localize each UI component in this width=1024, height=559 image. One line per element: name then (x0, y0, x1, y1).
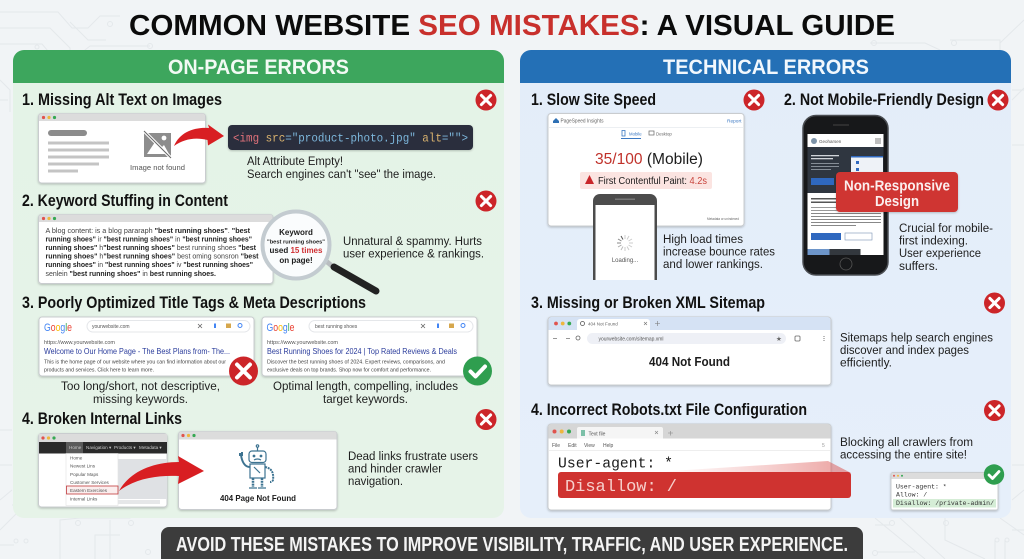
item 1 heading: 1. Slow Site Speed (531, 91, 656, 109)
icon: red x (476, 409, 496, 430)
note: blocking all crawlers: accessing the entire site! (840, 448, 967, 462)
bad search result card: This is the home page of our website where you can find information about our (44, 360, 226, 366)
browser with dropdown nav: Eastern Exercises (70, 488, 108, 493)
note: dead links: and hinder crawler (348, 462, 442, 476)
browser mockup with stuffed text: A blog content: is a blog pararaph "best running shoes". "best (46, 226, 250, 235)
note: mobile-first indexing: suffers. (899, 259, 938, 273)
pagespeed report card: PageSpeed Insights (560, 118, 604, 124)
item 1: missing alt text (22, 90, 496, 183)
bad search result card (39, 317, 254, 376)
good search result card: Discover the best running shoes of 2024. Expert reviews, comparisons, and (267, 360, 445, 366)
caption: good result: Optimal length, compelling, includes (273, 379, 458, 393)
text editor window: Help (603, 443, 614, 449)
code snippet (228, 125, 473, 150)
note: high load times: increase bounce rates (663, 244, 775, 258)
correct robots.txt card: User-agent: * (896, 484, 947, 490)
browser mockup with stuffed text: senlein "best running shoes" in best running shoes. (46, 269, 216, 278)
note: dead links: Dead links frustrate users (348, 449, 478, 463)
browser with dropdown nav: Popular Maps (70, 472, 99, 477)
magnifying glass callout: used 15 times (270, 246, 323, 255)
text editor window: User-agent: * (558, 456, 673, 472)
note: mobile-first indexing (899, 221, 993, 273)
note: unnatural and spammy: Unnatural & spammy. Hurts (343, 234, 482, 248)
browser mockup with stuffed text: running shoes" ir "best running shoes" in "best running shoes" (46, 234, 252, 244)
good search result card: Google (266, 322, 294, 334)
note: blocking all crawlers (840, 435, 973, 462)
bottom banner: AVOID THESE MISTAKES TO IMPROVE VISIBILITY, TRAFFIC, AND USER EXPERIENCE. (176, 534, 848, 556)
correct robots.txt card (891, 472, 998, 510)
browser with 404 page (178, 432, 337, 510)
item 3: missing xml sitemap (531, 292, 1005, 385)
browser mockup with stuffed text: running shoes" in "best running shoes" iv "best running shoes" (46, 260, 253, 269)
browser with dropdown nav: Newest Lins (70, 464, 96, 468)
phone mockup: Geoharsen (819, 139, 842, 144)
browser with dropdown nav: Products ▾ (114, 445, 136, 450)
note: unnatural and spammy: user experience & rankings. (343, 246, 484, 260)
good search result card (262, 317, 477, 376)
pagespeed report card: First Contentful Paint: 4.2s (598, 176, 707, 187)
icon: red x (476, 190, 496, 212)
note: dead links (348, 449, 478, 488)
text editor window: View (584, 443, 595, 449)
browser with dropdown nav: Internal Links (70, 496, 98, 502)
browser with dropdown nav: Customer Services (70, 480, 110, 485)
item 4 heading: 4. Incorrect Robots.txt File Configuration (531, 401, 807, 419)
browser with 404 sitemap: yourwebsite.com/sitemap.xml (598, 336, 664, 342)
item 2: not mobile friendly (784, 90, 1008, 275)
bad search result card: yourwebsite.com (92, 324, 130, 330)
item 4 heading: 4. Broken Internal Links (22, 410, 182, 428)
note: mobile-first indexing: User experience (899, 246, 981, 260)
note: dead links: navigation. (348, 474, 403, 488)
browser with dropdown nav: Navigation ▾ (86, 445, 112, 450)
browser mockup with broken image: Image not found (130, 163, 185, 172)
panel: technical errors (520, 50, 1011, 518)
heading: on-page errors: ON-PAGE ERRORS (168, 56, 349, 79)
pagespeed report card: Report (727, 118, 742, 124)
heading: technical errors: TECHNICAL ERRORS (663, 56, 869, 79)
browser with 404 sitemap: ★ (776, 335, 782, 343)
code snippet: <img src="product-photo.jpg" alt=""> (233, 132, 468, 146)
browser mockup with broken image (38, 114, 206, 183)
arrow between pages (119, 456, 204, 491)
caption: bad result: missing keywords. (93, 392, 188, 406)
pagespeed report card: Desktop (656, 132, 672, 136)
caption: bad result (61, 379, 220, 406)
note: mobile-first indexing: first indexing. (899, 234, 968, 248)
browser mockup with stuffed text: running shoes" h"best running shoes" best running shoes "best (46, 243, 256, 252)
disallow highlight (558, 461, 851, 498)
note: unnatural and spammy (343, 234, 484, 260)
icon: red x (744, 90, 764, 110)
text editor window: Edit (568, 443, 577, 449)
good search result card: Best Running Shoes for 2024 | Top Rated Reviews & Deals (267, 346, 457, 356)
item 4: broken internal links (22, 409, 496, 510)
caption: good result (273, 379, 458, 406)
correct robots.txt card: Disallow: /private-admin/ (896, 500, 994, 507)
item 4: robots.txt (531, 400, 1005, 510)
icon: green check (984, 464, 1004, 485)
browser with dropdown nav: Metadata ▾ (139, 445, 162, 450)
item 1: slow site speed (531, 90, 775, 280)
bad search result card: Google (44, 322, 72, 334)
browser with 404 sitemap: 404 Not Found (588, 322, 618, 326)
callout: non-responsive design: Non-Responsive (844, 178, 950, 194)
phone mockup (803, 116, 888, 275)
item 3: title tags and meta descriptions (22, 294, 492, 406)
icon: large red x (229, 356, 258, 386)
good search result card: best running shoes (315, 324, 358, 330)
item 2: keyword stuffing (22, 190, 496, 291)
note: sitemaps help: discover and index pages (840, 343, 969, 357)
good search result card: https://www.yourwebsite.com (267, 340, 338, 346)
icon: robot (240, 445, 273, 488)
note: alt attribute empty: Search engines can't "see" the image. (247, 167, 436, 181)
magnifying glass callout: on page! (279, 256, 313, 265)
text editor window: Text file (588, 432, 606, 438)
text editor window: 5 (822, 443, 825, 449)
panel: on-page errors (13, 50, 504, 518)
item 2 heading: 2. Keyword Stuffing in Content (22, 192, 228, 210)
callout: non-responsive design: Design (875, 194, 919, 210)
browser with 404 page: 404 Page Not Found (220, 493, 296, 503)
text editor window (548, 424, 831, 510)
magnifying glass callout (262, 212, 376, 291)
bad search result card: Welcome to Our Home Page - The Best Plans from- The... (44, 346, 230, 356)
title: COMMON WEBSITE SEO MISTAKES : A VISUAL GUIDE (129, 10, 895, 42)
bad search result card: products and services. Click here to learn more. (44, 368, 154, 374)
item 3 heading: 3. Missing or Broken XML Sitemap (531, 294, 765, 312)
callout: non-responsive design (836, 172, 958, 212)
note: high load times: and lower rankings. (663, 257, 763, 271)
browser mockup with stuffed text (38, 214, 273, 284)
note: sitemaps help (840, 330, 993, 370)
item 2 heading: 2. Not Mobile-Friendly Design (784, 91, 984, 109)
caption: good result: target keywords. (323, 392, 408, 406)
browser with dropdown nav: Home (69, 445, 82, 450)
note: alt attribute empty: Alt Attribute Empty! (247, 154, 343, 168)
good search result card: exclusive deals on top brands. Shop now for comfort and performance. (267, 368, 431, 374)
pagespeed report card: Mobile (629, 132, 642, 136)
note: mobile-first indexing: Crucial for mobile- (899, 221, 993, 235)
note: alt attribute empty (247, 154, 436, 181)
note: sitemaps help: efficiently. (840, 356, 892, 370)
pagespeed report card: 35/100 (Mobile) (595, 151, 703, 168)
magnifying glass callout: "best running shoes" (267, 240, 325, 246)
note: blocking all crawlers: Blocking all crawlers from (840, 435, 973, 449)
magnifying glass callout: Keyword (279, 228, 313, 237)
correct robots.txt card: Allow: / (896, 492, 927, 498)
icon: red x (984, 400, 1005, 421)
item 3 heading: 3. Poorly Optimized Title Tags & Meta Descriptions (22, 294, 366, 312)
browser with dropdown nav (38, 434, 167, 507)
icon: red x (984, 292, 1005, 314)
icon: red x (476, 90, 496, 110)
note: high load times (663, 232, 775, 271)
bad search result card: https://www.yourwebsite.com (44, 340, 115, 346)
phone with loading spinner: Loading... (612, 258, 639, 264)
note: sitemaps help: Sitemaps help search engines (840, 330, 993, 344)
browser with dropdown nav: Home (70, 456, 83, 460)
phone with loading spinner (593, 194, 657, 280)
caption: bad result: Too long/short, not descriptive, (61, 379, 220, 393)
browser with 404 sitemap: 404 Not Found (649, 354, 730, 369)
icon: green check (463, 356, 492, 386)
browser mockup with stuffed text: running shoes" h"best running shoes" best oming sonsron "best (46, 252, 259, 261)
arrow to code (174, 124, 224, 146)
pagespeed report card (548, 114, 744, 226)
bottom banner (161, 527, 863, 559)
browser with 404 sitemap (548, 317, 831, 385)
text editor window: File (552, 443, 560, 449)
disallow highlight: Disallow: / (565, 478, 677, 497)
pagespeed report card: Metadata or unindexed (707, 217, 739, 221)
icon: red x (988, 90, 1008, 110)
note: high load times: High load times (663, 232, 743, 246)
item 1 heading: 1. Missing Alt Text on Images (22, 91, 222, 109)
